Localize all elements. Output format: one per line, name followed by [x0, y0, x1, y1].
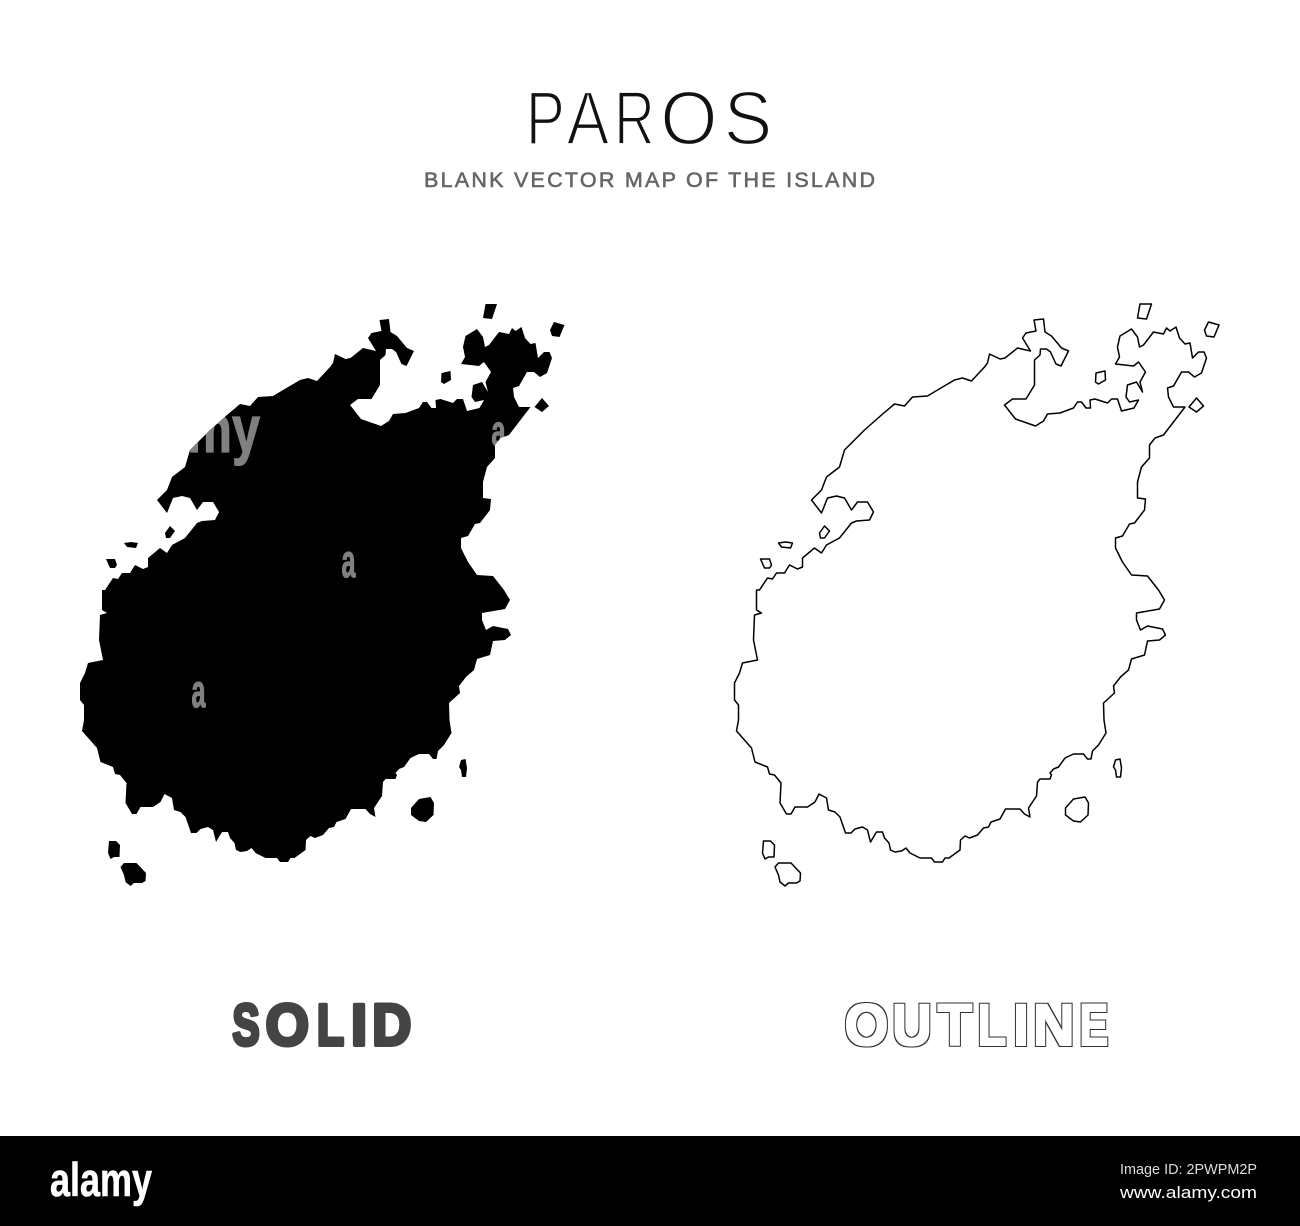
label: outline: L [978, 993, 1006, 1058]
label: solid: S [232, 993, 260, 1058]
title: R [614, 76, 655, 162]
website: www.alamy.com [1119, 1184, 1257, 1202]
title: A [567, 76, 609, 162]
label: outline: T [938, 993, 972, 1058]
watermark on solid map: a [192, 665, 206, 717]
label: outline: N [1033, 993, 1074, 1058]
image id: Image ID: 2PWPM2P [1120, 1162, 1257, 1178]
footer logo: alamy [50, 1153, 152, 1206]
watermark on solid map: a [492, 407, 506, 454]
label: solid: O [266, 993, 309, 1058]
subtitle: BLANK VECTOR MAP OF THE ISLAND [424, 168, 875, 192]
label: outline: E [1080, 993, 1108, 1058]
label: solid: D [372, 993, 411, 1058]
label: outline: O [845, 993, 888, 1058]
title: O [660, 76, 718, 162]
label: solid: L [317, 993, 344, 1058]
title: P [526, 76, 565, 162]
label: solid: I [351, 993, 367, 1058]
watermark on solid map [190, 416, 504, 708]
title: S [724, 76, 772, 162]
label: outline: U [892, 993, 932, 1058]
solid map of the island [80, 304, 564, 886]
watermark on solid map: alamy [117, 392, 260, 466]
label: outline: I [1013, 993, 1029, 1058]
footer bar [0, 1136, 1300, 1226]
watermark on solid map: a [342, 535, 356, 587]
outline map of the island [734, 304, 1219, 886]
